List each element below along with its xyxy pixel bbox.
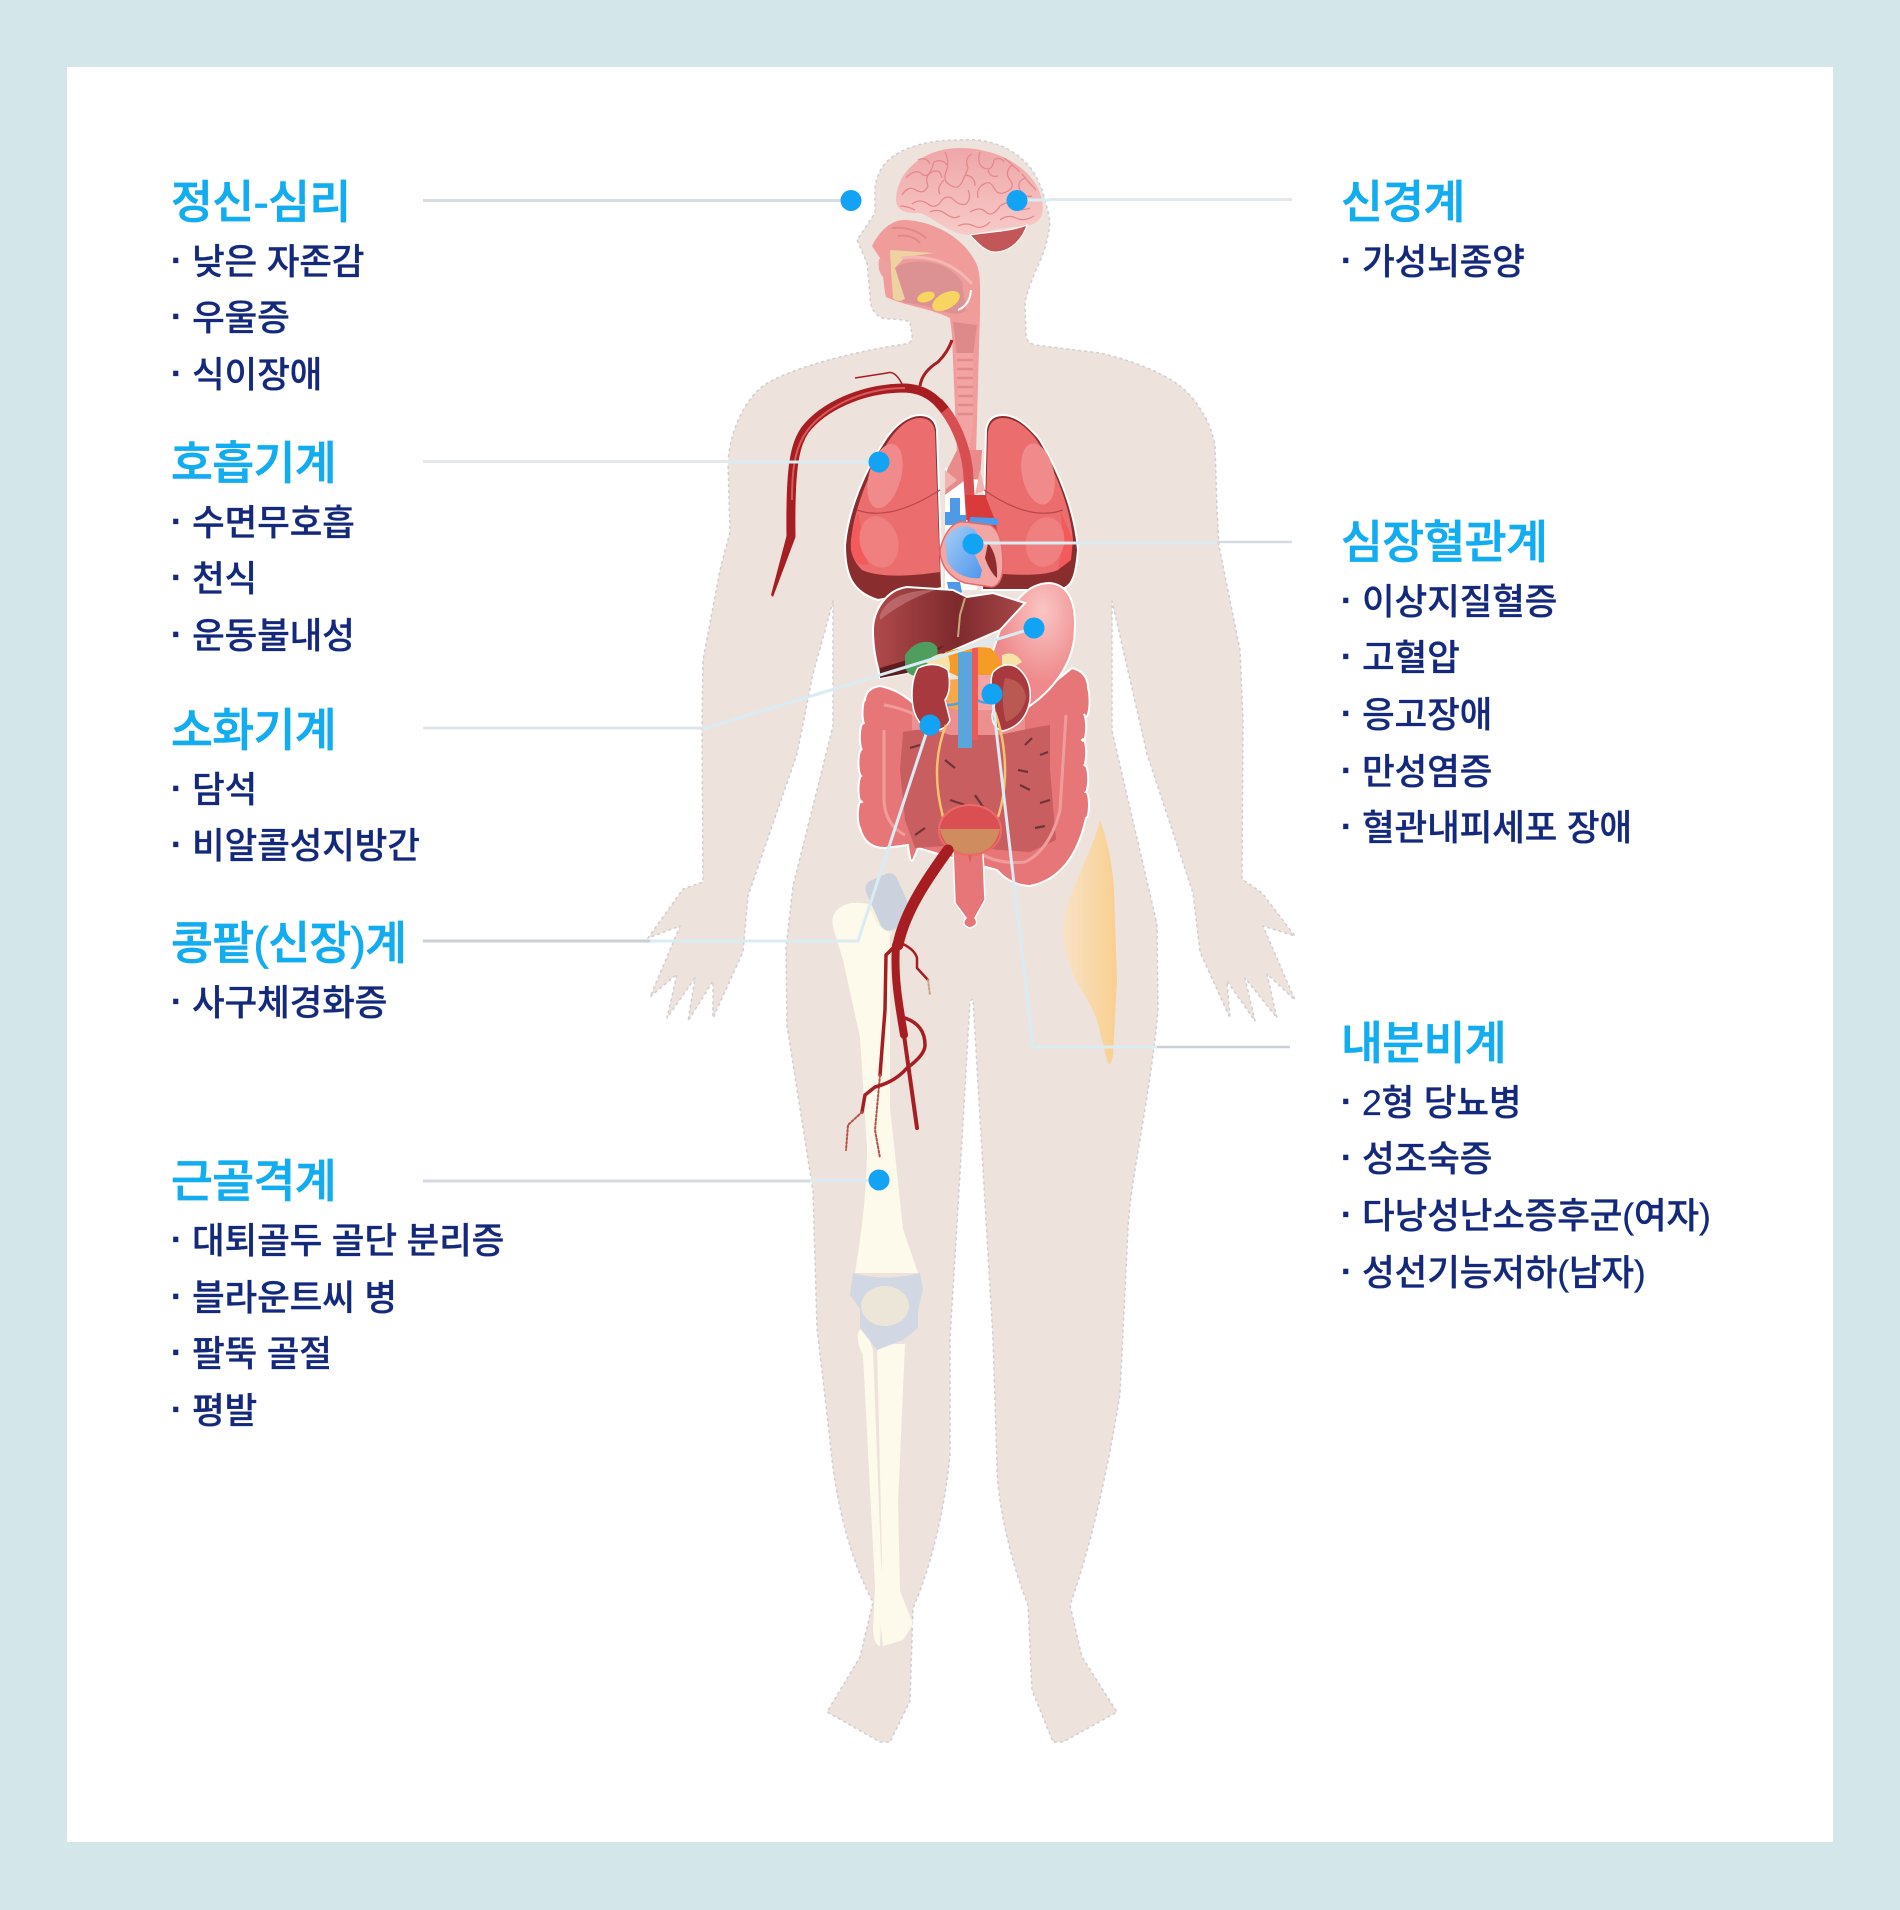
text block: renal system: ·	[171, 982, 182, 1020]
text block: digestive system: 담석	[192, 770, 257, 810]
leader: nervous system	[1006, 190, 1292, 211]
text block: cardiovascular system: 심장혈관계	[1341, 516, 1547, 568]
fat deposit on right hip	[1063, 820, 1117, 1064]
leader: musculoskeletal system	[423, 1170, 890, 1190]
text block: endocrine system: ·	[1341, 1253, 1352, 1291]
text block: musculoskeletal system	[171, 1156, 504, 1431]
text block: endocrine system: ·	[1341, 1082, 1352, 1120]
text block: endocrine system: ·	[1341, 1139, 1352, 1177]
leader: endocrine system	[982, 684, 1290, 1047]
nasal cavity, mouth and esophagus	[872, 220, 980, 455]
leader: respiratory system	[423, 452, 890, 472]
text block: endocrine system: ·	[1341, 1196, 1352, 1234]
text block: nervous system	[1341, 176, 1525, 282]
heart	[940, 495, 1003, 594]
femoral arteries of the leg	[846, 850, 948, 1158]
text block: cardiovascular system: 응고장애	[1362, 695, 1492, 735]
text block: mental health: 정신-심리	[171, 176, 351, 228]
text block: nervous system: 가성뇌종양	[1362, 242, 1525, 282]
text block: cardiovascular system: 이상지질혈증	[1362, 582, 1557, 622]
text block: musculoskeletal system: 근골격계	[171, 1156, 336, 1207]
text block: respiratory system: ·	[171, 559, 182, 597]
large and small intestine	[858, 668, 1090, 886]
text block: cardiovascular system: ·	[1341, 638, 1352, 676]
brain with folds	[896, 148, 1043, 252]
text block: endocrine system: 내분비계	[1341, 1018, 1506, 1068]
text block: digestive system	[171, 704, 420, 866]
text block: respiratory system: ·	[171, 616, 182, 654]
body silhouette	[648, 140, 1295, 1742]
text block: endocrine system: 성선기능저하(남자)	[1362, 1253, 1646, 1293]
liver and gallbladder	[873, 587, 1025, 678]
text block: mental health: ·	[171, 355, 182, 393]
text block: digestive system: ·	[171, 770, 182, 808]
text block: mental health: 식이장애	[192, 355, 322, 395]
ureters	[937, 712, 1005, 817]
text block: mental health	[171, 176, 364, 395]
text block: mental health: 우울증	[192, 298, 290, 338]
text block: musculoskeletal system: ·	[171, 1391, 182, 1429]
text block: cardiovascular system: 만성염증	[1362, 752, 1492, 792]
text block: musculoskeletal system: 블라운트씨 병	[192, 1278, 397, 1318]
text block: endocrine system	[1341, 1018, 1711, 1293]
text block: nervous system: 신경계	[1341, 176, 1465, 228]
text block: mental health: ·	[171, 242, 182, 280]
text block: cardiovascular system: 혈관내피세포 장애	[1362, 808, 1632, 848]
text block: musculoskeletal system: ·	[171, 1278, 182, 1316]
text block: renal system	[171, 918, 406, 1022]
text block: respiratory system: 운동불내성	[192, 616, 355, 656]
text block: endocrine system: 성조숙증	[1362, 1139, 1492, 1179]
text block: musculoskeletal system: 평발	[192, 1391, 257, 1431]
text block: musculoskeletal system: 팔뚝 골절	[192, 1334, 332, 1374]
text block: cardiovascular system: ·	[1341, 695, 1352, 733]
text block: cardiovascular system	[1341, 516, 1632, 848]
text block: renal system: 콩팥(신장)계	[171, 918, 406, 968]
text block: digestive system: ·	[171, 826, 182, 864]
rectum	[953, 850, 985, 928]
text block: respiratory system: 호흡기계	[171, 438, 336, 488]
text block: cardiovascular system: ·	[1341, 808, 1352, 846]
text block: musculoskeletal system: ·	[171, 1334, 182, 1372]
text block: renal system: 사구체경화증	[192, 982, 387, 1022]
text block: respiratory system: 수면무호흡	[192, 502, 355, 542]
aorta arch and arm artery	[771, 340, 971, 597]
text block: cardiovascular system: ·	[1341, 582, 1352, 620]
stomach	[990, 583, 1075, 712]
bladder	[939, 805, 1001, 863]
leader: cardiovascular system	[962, 534, 1292, 554]
text block: mental health: 낮은 자존감	[192, 242, 364, 282]
text block: digestive system: 소화기계	[171, 704, 336, 756]
kidneys, pancreas, adrenal glands and great vessels	[912, 647, 1030, 748]
text block: endocrine system: 다낭성난소증후군(여자)	[1362, 1196, 1711, 1236]
text block: musculoskeletal system: 대퇴골두 골단 분리증	[192, 1221, 504, 1261]
leader: digestive system	[423, 618, 1044, 729]
text block: digestive system: 비알콜성지방간	[192, 826, 420, 866]
text block: respiratory system: 천식	[192, 559, 257, 599]
mediastinum and bronchi	[945, 450, 985, 590]
text block: mental health: ·	[171, 298, 182, 336]
text block: musculoskeletal system: ·	[171, 1221, 182, 1259]
text block: endocrine system: 2형 당뇨병	[1362, 1082, 1521, 1122]
lungs	[845, 415, 1078, 600]
text block: nervous system: ·	[1341, 242, 1352, 280]
text block: cardiovascular system: 고혈압	[1362, 638, 1460, 678]
text block: respiratory system: ·	[171, 502, 182, 540]
leader: mental health	[423, 190, 862, 211]
leader: renal system	[423, 714, 940, 941]
text block: respiratory system	[171, 438, 355, 656]
text block: cardiovascular system: ·	[1341, 752, 1352, 790]
bones: femur, pelvis, knee, tibia, fibula	[832, 870, 923, 1646]
